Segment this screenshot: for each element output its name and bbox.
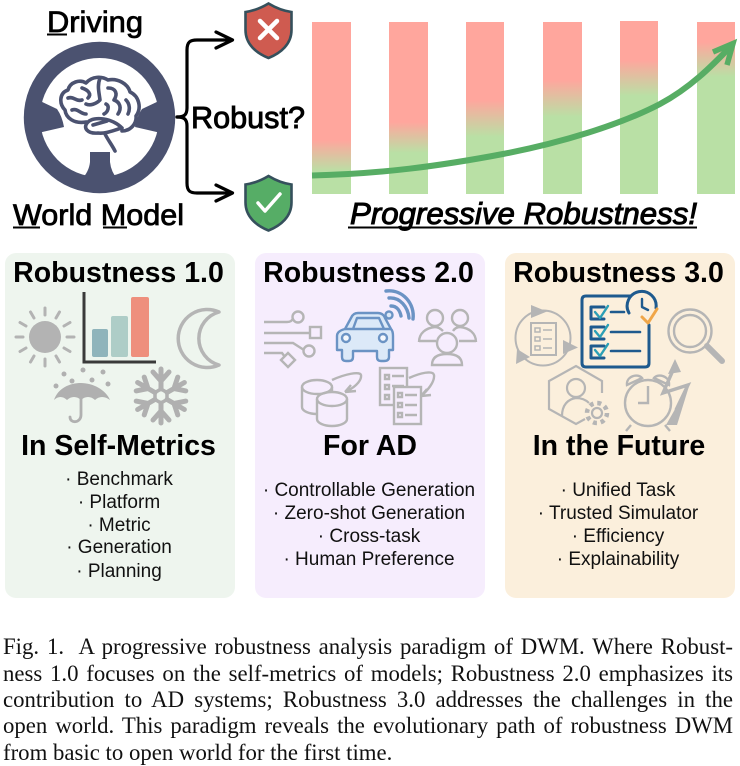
list xyxy=(65,469,173,582)
icon: user with gear xyxy=(549,366,607,424)
icon: red shield with cross xyxy=(246,4,292,58)
subtitle: In the Future xyxy=(533,430,705,462)
panel: Robustness 3.0 xyxy=(505,253,735,598)
panel title: Robustness 2.0 xyxy=(263,257,474,289)
list: · Platform xyxy=(78,492,160,513)
icon: moon xyxy=(178,310,219,367)
icon: alarm clock with lightning arrow xyxy=(625,359,690,431)
icon: checklist with clock xyxy=(582,291,657,367)
list xyxy=(538,480,699,570)
bracket arrows xyxy=(177,32,232,201)
icon: people xyxy=(419,310,476,365)
caption: Fig. 1. A progressive robustness analysis paradigm of DWM. Where Robust- xyxy=(3,634,733,659)
panel: Robustness 2.0 xyxy=(255,253,485,598)
list: · Cross-task xyxy=(318,526,421,547)
panel title: Robustness 3.0 xyxy=(513,257,724,289)
panel title: Robustness 1.0 xyxy=(13,257,224,289)
bar chart: progressive robustness xyxy=(312,21,735,194)
list: · Trusted Simulator xyxy=(538,503,699,524)
subtitle: In Self-Metrics xyxy=(21,430,216,462)
list: · Unified Task xyxy=(561,480,676,501)
icon: steering wheel with brain xyxy=(24,42,175,193)
list: · Benchmark xyxy=(65,469,173,490)
icon: sun xyxy=(16,308,74,366)
list: · Explainability xyxy=(557,549,680,570)
caption: from basic to open world for the first time. xyxy=(3,740,392,765)
icon: brain xyxy=(61,77,139,151)
heading: Driving: Driving xyxy=(47,6,143,39)
list: · Generation xyxy=(66,537,172,558)
list xyxy=(263,480,475,570)
icon: mini bar chart xyxy=(84,292,156,362)
caption xyxy=(3,634,733,765)
list: · Efficiency xyxy=(572,526,665,547)
arrow: rising robustness curve xyxy=(312,44,733,176)
icon: snowflake xyxy=(134,369,188,423)
icon: wifi signal xyxy=(386,291,413,319)
caption: open world. This paradigm reveals the evolutionary path of robustness DWM xyxy=(3,713,733,738)
list: · Planning xyxy=(76,561,162,582)
icon: document cycle xyxy=(516,305,578,366)
icon: umbrella with rain xyxy=(54,368,110,422)
subtitle: For AD xyxy=(323,430,417,462)
icon: data cylinders xyxy=(302,373,361,426)
list: · Controllable Generation xyxy=(263,480,475,501)
label: Robust?: Robust? xyxy=(191,101,305,135)
list: · Zero-shot Generation xyxy=(273,503,465,524)
list: · Human Preference xyxy=(283,549,455,570)
caption: ness 1.0 focuses on the self-metrics of models; Robustness 2.0 emphasizes its xyxy=(3,661,733,686)
icon: magnifier xyxy=(668,310,722,361)
panel: Robustness 1.0 xyxy=(5,253,235,598)
caption: contribution to AD systems; Robustness 3.0 addresses the challenges in the xyxy=(3,687,733,712)
heading: Progressive Robustness!: Progressive Robustness! xyxy=(350,196,697,231)
icon: circuit lines xyxy=(264,312,321,367)
icon: documents xyxy=(380,368,434,424)
icon: green shield with check xyxy=(246,176,292,230)
icon: connected car xyxy=(337,291,413,361)
heading: World Model: World Model xyxy=(13,199,184,232)
list: · Metric xyxy=(87,515,151,536)
